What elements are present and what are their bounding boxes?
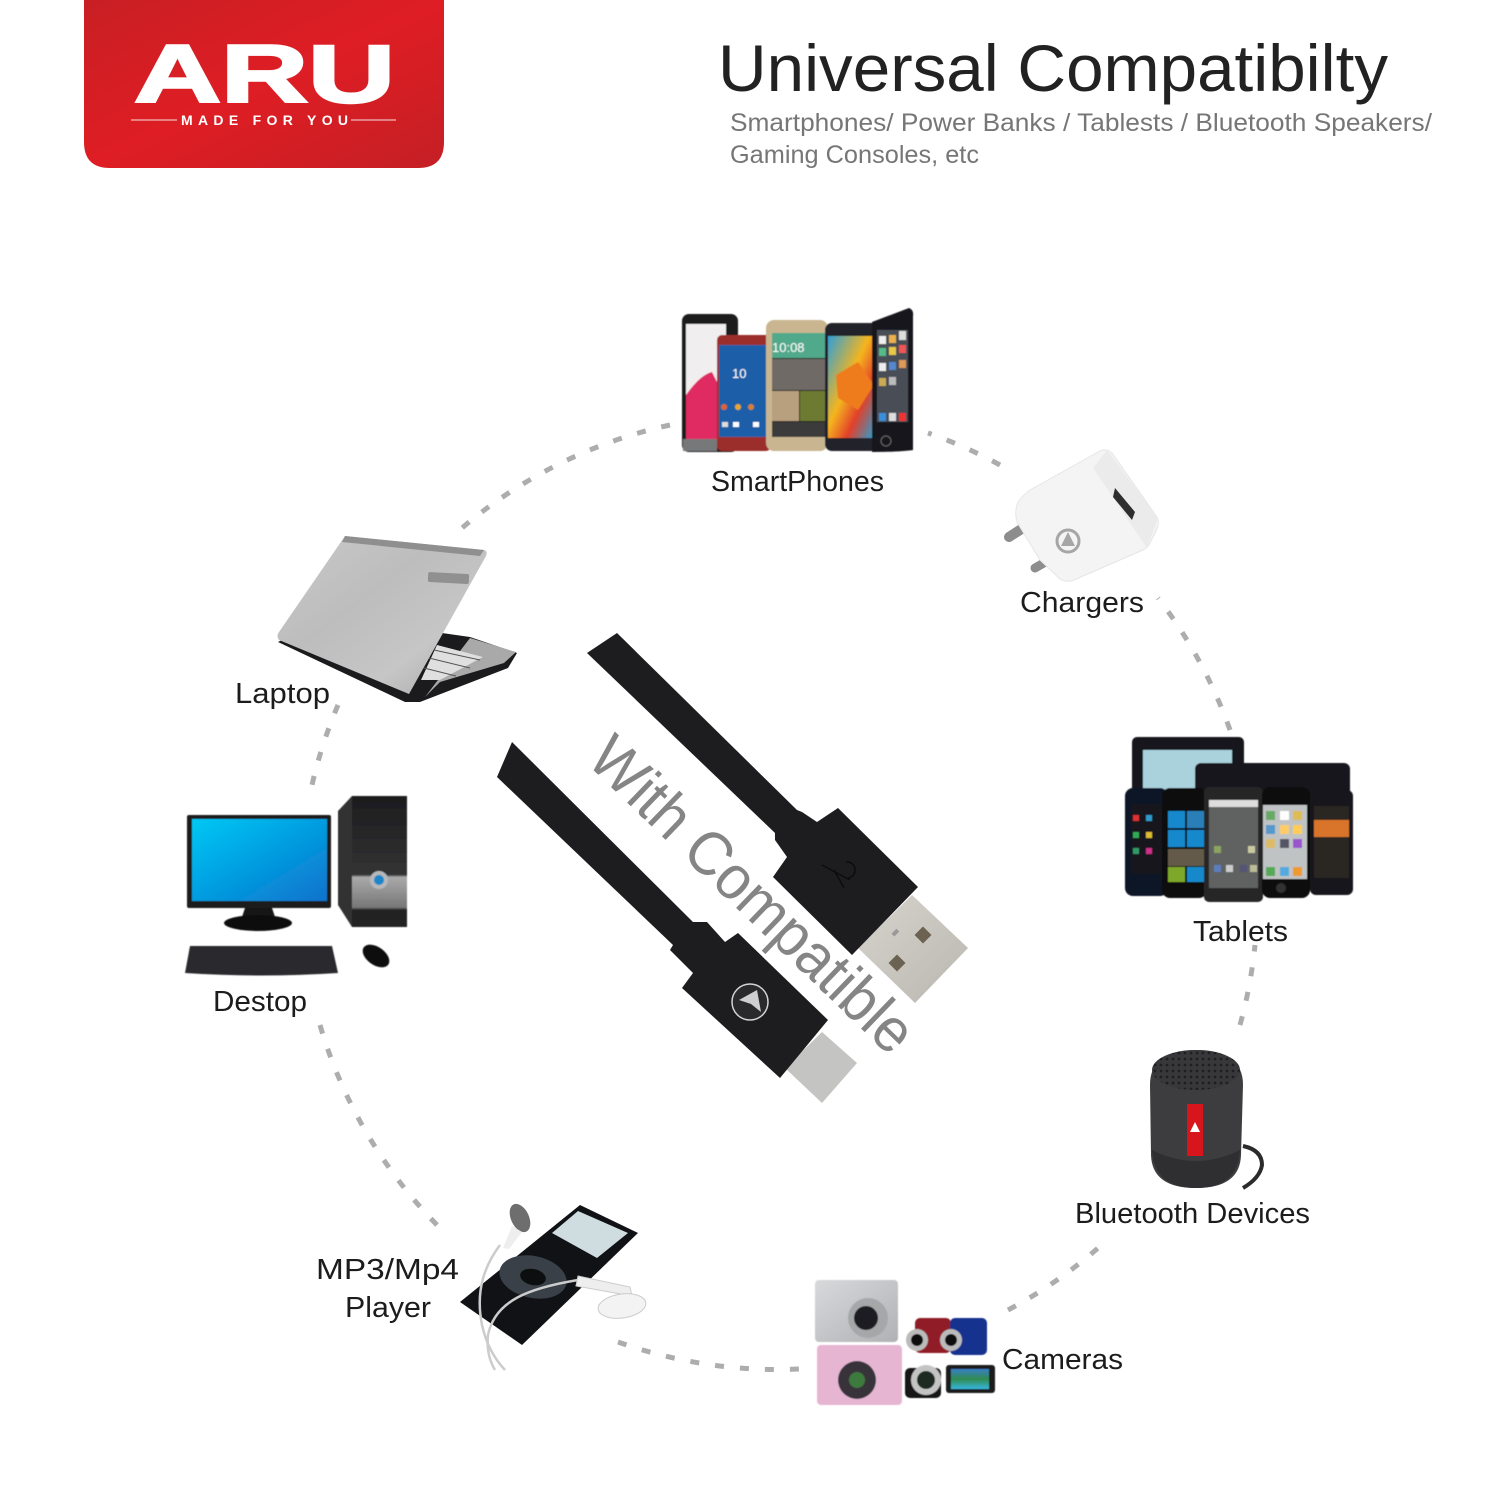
icon: cameras	[815, 1280, 995, 1405]
icon: USB cable	[497, 633, 968, 1103]
icon: smartphones	[682, 308, 913, 452]
label: cameras: Cameras	[1002, 1344, 1123, 1376]
label: mp3/mp4 player	[316, 1254, 459, 1324]
micro-usb plug metal	[785, 1032, 857, 1103]
micro-usb cable and housing	[497, 742, 828, 1078]
icon: bluetooth speaker	[1150, 1050, 1262, 1188]
label: chargers: Chargers	[1020, 587, 1144, 619]
label: bluetooth devices: Bluetooth Devices	[1075, 1198, 1310, 1230]
usb-a plug metal	[858, 895, 968, 1003]
label: tablets: Tablets	[1193, 916, 1288, 948]
dashed compatibility ring	[312, 425, 1255, 1370]
logo: ARU made for you: ARU	[134, 29, 395, 120]
logo: ARU made for you: MADE FOR YOU	[181, 112, 348, 128]
icon: desktop computer	[185, 796, 407, 976]
usb-a cable and housing	[587, 633, 918, 955]
subtitle: Smartphones/ Power Banks / Tablests / Bluetooth Speakers/	[730, 109, 1432, 137]
icon: smartphones: 10	[732, 366, 746, 381]
icon: tablets	[1125, 737, 1353, 902]
icon: charger	[1009, 450, 1158, 581]
rotated caption: With Compatible	[575, 722, 929, 1067]
icon: smartphones: 10:08	[772, 340, 805, 355]
subtitle: Gaming Consoles, etc	[730, 141, 979, 169]
label: mp3/mp4 player: MP3/Mp4	[316, 1254, 459, 1286]
label: laptop: Laptop	[235, 678, 330, 710]
logo: ARU made for you	[84, 0, 444, 168]
title: Universal Compatibilty	[718, 31, 1388, 105]
label: mp3/mp4 player: Player	[345, 1292, 431, 1324]
brand badge	[732, 984, 768, 1020]
label: smartphones: SmartPhones	[711, 466, 884, 498]
label: desktop: Destop	[213, 986, 307, 1018]
icon: laptop	[278, 536, 517, 702]
subtitle	[730, 109, 1432, 169]
icon: mp3 player	[460, 1201, 647, 1370]
